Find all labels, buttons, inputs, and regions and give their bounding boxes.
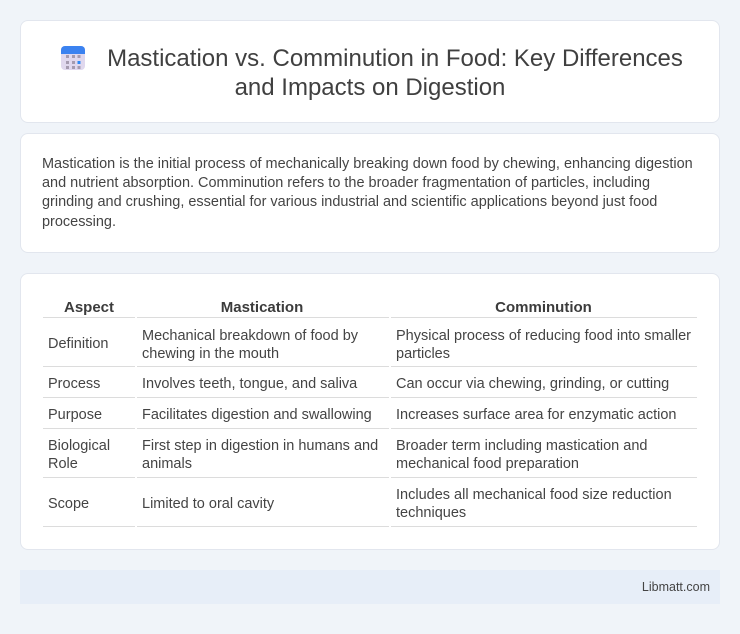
text block: intro: processing. [42, 214, 116, 230]
row: scope: techniques [396, 505, 466, 521]
text block: intro [42, 156, 693, 230]
row: purpose [48, 407, 676, 423]
row: purpose: Facilitates digestion and swallowing [142, 407, 372, 423]
panel: intro text card [20, 133, 720, 253]
row: definition: chewing in the mouth [142, 346, 279, 362]
footer text: Libmatt.com [642, 580, 710, 594]
row: scope: Scope [48, 496, 89, 512]
footer bar [20, 570, 720, 604]
title: and Impacts on Digestion [235, 74, 505, 101]
row: scope: Includes all mechanical food size reduction [396, 487, 672, 503]
row: scope: Limited to oral cavity [142, 496, 274, 512]
title [107, 45, 683, 101]
title: Mastication vs. Comminution in Food: Key Differences [107, 45, 683, 72]
row: biological role: animals [142, 456, 192, 472]
table header row: Mastication [221, 299, 303, 316]
row: biological role: Broader term including mastication and [396, 438, 647, 454]
text block: intro: Mastication is the initial process of mechanically breaking down food by chewing, enhancing digestion [42, 156, 693, 172]
row: biological role: Role [48, 456, 78, 472]
text block: intro: grinding and crushing, essential for various industrial and scientific applications beyond just food [42, 194, 657, 210]
row: biological role: First step in digestion in humans and [142, 438, 378, 454]
row: definition [48, 328, 691, 362]
panel: comparison table [20, 273, 720, 550]
row: definition: Mechanical breakdown of food by [142, 328, 358, 344]
row: biological role: Biological [48, 438, 110, 454]
row: definition: Physical process of reducing food into smaller [396, 328, 691, 344]
row: process: Can occur via chewing, grinding, or cutting [396, 376, 669, 392]
panel: header card [20, 20, 720, 123]
row: process: Process [48, 376, 100, 392]
table header row: Aspect [64, 299, 114, 316]
icon: calendar [61, 46, 85, 70]
row: biological role: mechanical food preparation [396, 456, 579, 472]
row: process [48, 376, 669, 392]
row: purpose: Purpose [48, 407, 102, 423]
table header row: Comminution [495, 299, 592, 316]
row: biological role [48, 438, 647, 472]
row: scope [48, 487, 672, 521]
row: purpose: Increases surface area for enzymatic action [396, 407, 676, 423]
text block: intro: and nutrient absorption. Comminution refers to the broader fragmentation of particles, including [42, 175, 650, 191]
row: definition: particles [396, 346, 450, 362]
table header row [64, 299, 592, 316]
row: definition: Definition [48, 336, 108, 352]
row: process: Involves teeth, tongue, and saliva [142, 376, 357, 392]
